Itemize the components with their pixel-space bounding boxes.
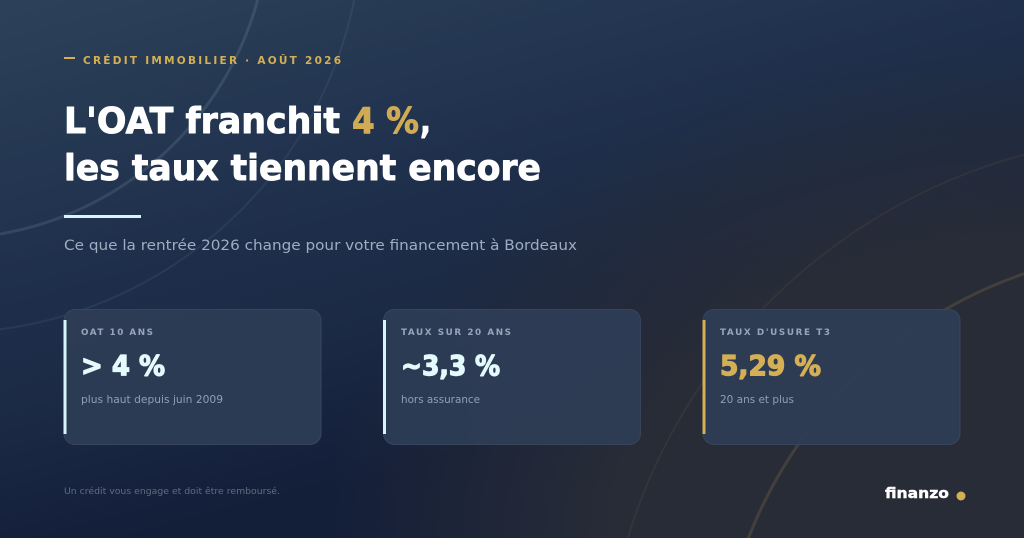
panel: taux sur 20 ans: TAUX SUR 20 ANS bbox=[401, 328, 511, 338]
title: les taux tiennent encore bbox=[64, 148, 541, 189]
panel: taux d'usure T3: TAUX D'USURE T3 bbox=[720, 328, 830, 338]
footer disclaimer: Un crédit vous engage et doit être remboursé. bbox=[64, 486, 280, 497]
panel: OAT 10 ans bbox=[64, 310, 321, 444]
panel: OAT 10 ans: plus haut depuis juin 2009 bbox=[81, 394, 223, 406]
panel: taux sur 20 ans bbox=[383, 310, 640, 444]
panel: OAT 10 ans: OAT 10 ANS bbox=[81, 328, 153, 338]
title: L'OAT franchit bbox=[64, 101, 340, 142]
panel: OAT 10 ans: > 4 % bbox=[81, 349, 165, 382]
subtitle: Ce que la rentrée 2026 change pour votre financement à Bordeaux bbox=[64, 238, 577, 254]
panel: taux sur 20 ans: hors assurance bbox=[401, 394, 480, 406]
title: , bbox=[420, 101, 431, 142]
panel: taux d'usure T3: 20 ans et plus bbox=[720, 394, 794, 406]
eyebrow: CRÉDIT IMMOBILIER · AOÛT 2026 bbox=[83, 54, 341, 67]
title: 4 % bbox=[352, 101, 419, 142]
logo: finanzo: finanzo bbox=[885, 486, 949, 502]
title bbox=[64, 101, 541, 189]
panel: taux sur 20 ans: ~3,3 % bbox=[401, 349, 500, 382]
panel: taux d'usure T3 bbox=[702, 310, 960, 444]
decorative arcs top left bbox=[0, 0, 354, 329]
panel: taux d'usure T3: 5,29 % bbox=[720, 349, 821, 382]
decorative arcs bottom right bbox=[628, 155, 1024, 538]
title rule bbox=[64, 215, 141, 218]
